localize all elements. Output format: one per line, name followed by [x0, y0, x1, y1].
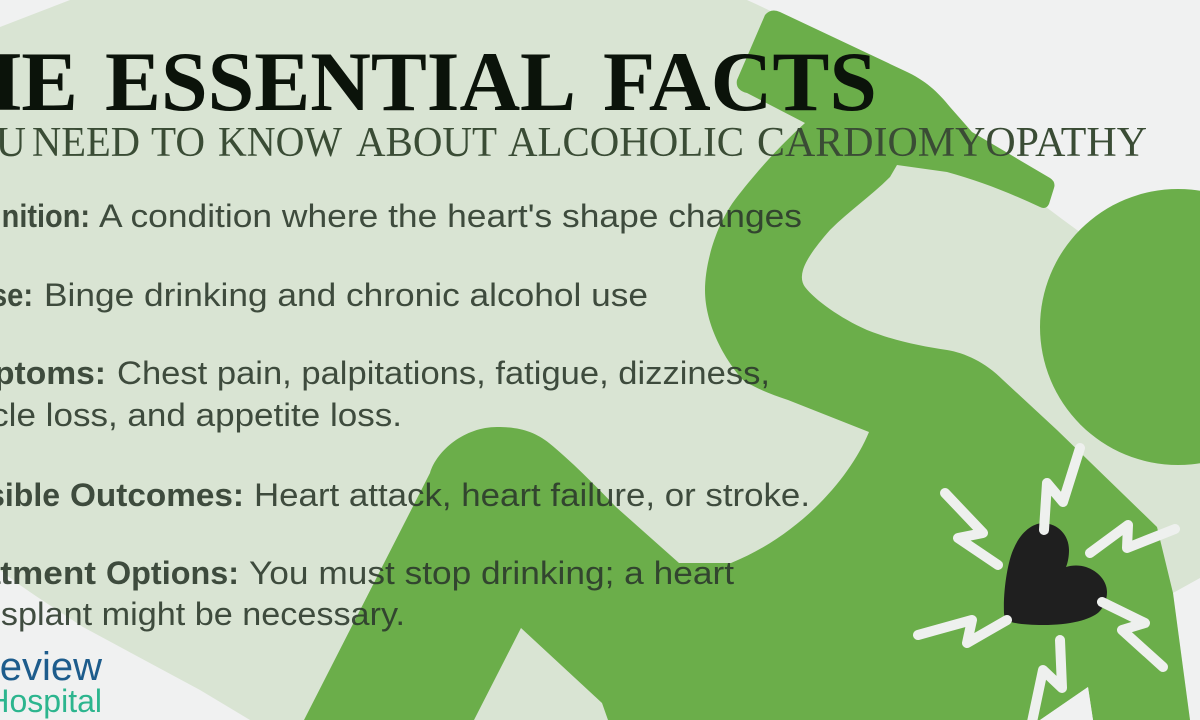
title	[0, 35, 877, 129]
subtitle: KNOW	[218, 120, 342, 166]
subtitle: ALCOHOLIC	[508, 120, 744, 166]
fact: symptoms: Chest pain, palpitations, fatigue, dizziness,	[117, 355, 770, 391]
title: FACTS	[603, 35, 877, 129]
fact: possible outcomes	[0, 477, 810, 513]
figure: person drinking from bottle	[304, 11, 1200, 720]
title: ESSENTIAL	[105, 35, 576, 129]
head	[1040, 189, 1200, 465]
fact: cause: Binge drinking and chronic alcohol use	[44, 277, 648, 313]
fact: definition: A condition where the heart's shape changes	[99, 198, 802, 234]
icon: heart	[1004, 523, 1107, 625]
subtitle: NEED	[32, 120, 140, 166]
fact: treatment options	[0, 555, 734, 632]
icon: pain bolts around heart	[918, 448, 1175, 720]
fact: treatment options: Options:	[106, 555, 239, 591]
subtitle: TO	[151, 120, 205, 166]
figure body and bottle	[304, 11, 1190, 720]
fact: possible outcomes: Outcomes:	[70, 477, 244, 513]
fact: symptoms	[0, 355, 770, 433]
subtitle: CARDIOMYOPATHY	[757, 120, 1147, 166]
subtitle: ABOUT	[356, 120, 497, 166]
subtitle	[0, 120, 1147, 166]
logo	[0, 645, 102, 719]
gap under the torso	[1040, 687, 1093, 720]
fact: possible outcomes: Heart attack, heart failure, or stroke.	[254, 477, 810, 513]
facts list	[0, 198, 810, 632]
fact: treatment options: You must stop drinking; a heart	[249, 555, 734, 591]
